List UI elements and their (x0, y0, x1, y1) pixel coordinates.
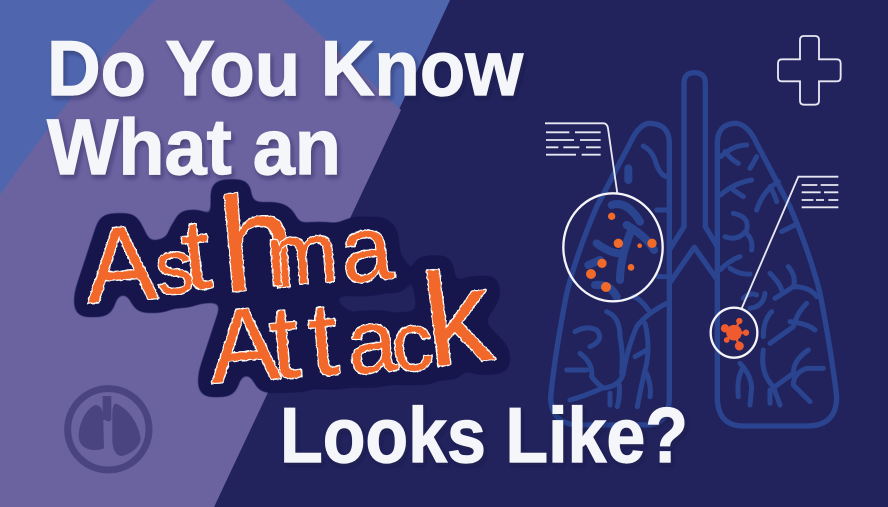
heading: looks like: Looks Like? (280, 391, 688, 479)
heading: what an: What an (47, 102, 341, 191)
heading: asthma attack: m (263, 204, 341, 305)
heading: asthma attack: c (388, 296, 436, 390)
heading: do you know: Do You Know (47, 24, 523, 112)
callout: right lung (711, 177, 838, 358)
icon: medical plus (778, 36, 841, 105)
heading: asthma attack: s (151, 223, 198, 312)
heading: asthma attack: A (81, 203, 160, 326)
heading: asthma attack: t (177, 198, 216, 312)
heading: asthma attack: h (214, 166, 301, 321)
heading: asthma attack: a (335, 196, 398, 303)
left lung (551, 123, 669, 425)
callouts and markers (545, 36, 841, 358)
heading: asthma attack: t (265, 284, 304, 402)
callout: left lung (545, 123, 663, 301)
heading: asthma attack: t (304, 281, 343, 399)
lungs illustration (551, 73, 837, 426)
icon: lungs badge (68, 389, 149, 470)
virus icon (722, 319, 748, 349)
right lung (717, 123, 837, 426)
heading: asthma attack: k (415, 241, 500, 395)
trachea (669, 73, 717, 283)
heading: asthma attack: A (206, 285, 283, 406)
orange particles (586, 213, 657, 292)
heading: asthma attack: a (343, 290, 400, 393)
